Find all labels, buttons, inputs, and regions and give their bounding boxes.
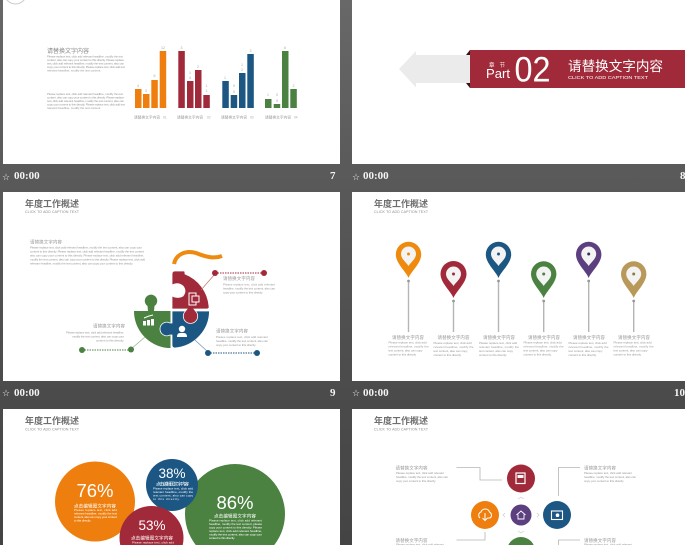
pin captions: relevant headline, modify the bbox=[524, 344, 564, 348]
bar chart: green: 04 bbox=[294, 116, 298, 120]
footer: slide 8 bbox=[352, 170, 685, 183]
text block: top left: copy your content to this directly. bbox=[396, 479, 436, 483]
bubble: 86%: content to this directly. bbox=[209, 536, 235, 540]
node: blue camera bbox=[543, 501, 571, 529]
panel: slide 11 bubbles bbox=[3, 409, 340, 545]
text block: top right: copy your content to this directly. bbox=[584, 479, 624, 483]
panel: slide 12 process bbox=[352, 409, 685, 545]
pin captions: 请替换文字内容 bbox=[528, 334, 560, 341]
title: slide 9: 年度工作概述 bbox=[25, 198, 79, 209]
title: slide 10: 年度工作概述 bbox=[374, 198, 428, 209]
panel: slide 7 bar charts bbox=[3, 0, 340, 164]
node: green bbox=[507, 537, 535, 545]
bar chart: green: 0 bbox=[276, 93, 278, 97]
text block: top right: Please replace text, click add relevant bbox=[584, 471, 632, 475]
pin captions bbox=[388, 334, 654, 357]
title: slide 11 bbox=[25, 415, 80, 432]
bubble: 53%: 点击编辑图文字内容 bbox=[131, 534, 173, 542]
bar chart: orange: 请替换文字内容 bbox=[134, 114, 160, 120]
pin captions: Please replace text, click add bbox=[614, 340, 652, 344]
pin captions: content to this directly. bbox=[524, 352, 552, 356]
pin captions: relevant headline, modify the bbox=[479, 345, 519, 349]
text block: slide 7 lower: content, also can copy your content to this directly. Please replace bbox=[47, 96, 124, 100]
footer: slide 7 bbox=[2, 170, 336, 183]
text block: bottom right: 请替换文字内容 bbox=[584, 537, 616, 544]
callout: blue: headline, modify the text content, also can bbox=[216, 339, 268, 343]
pin captions: relevant headline, modify the bbox=[614, 344, 654, 348]
text block: slide 7 upper: Please replace text, click add relevant headline, modify the text bbox=[47, 54, 123, 58]
text block: slide 7 lower: text, click add relevant headline, modify the text content, also can bbox=[47, 99, 124, 103]
text block: bottom right bbox=[584, 537, 632, 545]
bar chart: blue: 2 bbox=[241, 68, 243, 72]
icon: person bbox=[177, 326, 187, 337]
section label: 章节 bbox=[489, 61, 505, 69]
bubble: 86%: replace text, click add relevant headline, bbox=[209, 529, 262, 533]
bubble: 86%: modify the text content, also can copy your bbox=[209, 532, 262, 536]
bubble: 76%: 76% bbox=[76, 480, 114, 501]
title: slide 10: CLICK TO ADD CAPTION TEXT bbox=[374, 210, 429, 214]
bar chart: crimson: 2 bbox=[197, 65, 199, 69]
bar chart: orange: 6 bbox=[154, 74, 156, 78]
text block: top left: headline, modify the text content, also can bbox=[396, 475, 448, 479]
pin: orange bbox=[396, 242, 421, 332]
callout: green: 请替换文字内容 bbox=[93, 322, 126, 330]
footer: slide 9 bbox=[2, 387, 336, 399]
bar chart: blue: 1 bbox=[224, 76, 226, 80]
callout: blue: Please replace text, click add relevant bbox=[216, 335, 268, 339]
bar chart: green: 1 bbox=[267, 93, 269, 97]
pin: tan bbox=[621, 261, 646, 332]
pin: green bbox=[531, 261, 556, 332]
bar chart: green: 5 bbox=[276, 99, 278, 103]
pin captions: 请替换文字内容 bbox=[483, 334, 516, 341]
bubble: 76% bbox=[55, 462, 135, 542]
bar chart: crimson: 4 bbox=[189, 76, 191, 80]
bar chart: green: 6 bbox=[284, 46, 286, 50]
bubble: 76%: relevant headline, modify the text bbox=[74, 512, 117, 516]
pin captions: content to this directly. bbox=[568, 353, 597, 357]
pin captions: text content, also can copy bbox=[524, 348, 558, 352]
pin captions: Please replace text, click add bbox=[434, 341, 472, 345]
panel: slide 10 map pins bbox=[352, 192, 685, 381]
footer: slide 9: 00:00 bbox=[14, 387, 40, 399]
text block: top right bbox=[584, 464, 636, 483]
callout: green: content to this directly. bbox=[96, 338, 124, 342]
callout: blue bbox=[195, 328, 268, 356]
bar chart: orange bbox=[134, 46, 167, 120]
footer: slide 10: ☆ bbox=[352, 389, 360, 399]
bubble: 38%: 38% bbox=[158, 466, 186, 481]
pin captions: Please replace text, click add bbox=[479, 341, 517, 345]
pin captions: Please replace text, click add bbox=[568, 341, 607, 345]
bar chart: blue: 1 bbox=[241, 63, 243, 67]
bar chart: crimson: 请替换文字内容 bbox=[177, 114, 203, 120]
bubble: 76%: Please replace text, click add bbox=[74, 508, 117, 512]
title: slide 11: 年度工作概述 bbox=[25, 415, 79, 426]
pin: crimson bbox=[440, 261, 466, 332]
bar chart: crimson: 1 bbox=[206, 84, 208, 88]
node: purple home bbox=[510, 504, 532, 526]
callout: red: 请替换文字内容 bbox=[223, 275, 256, 282]
text block: top left: modify the text content, also can copy your content to this directly. Please replace text, click add bbox=[30, 258, 145, 262]
puzzle: red piece bbox=[172, 271, 209, 323]
pin: purple bbox=[576, 242, 601, 332]
bubble: 86%: Please replace text, click add relevant bbox=[209, 518, 262, 522]
banner: red ribbon bbox=[470, 50, 685, 88]
footer: slide 10: 10 bbox=[674, 387, 685, 399]
bubble: 86%: copy your content to this directly. Please bbox=[209, 526, 262, 530]
pin captions: content to this directly. bbox=[388, 352, 417, 356]
text block: top left bbox=[30, 238, 145, 266]
ribbon folds bbox=[466, 50, 470, 55]
text block: top left: also can copy your content to this directly. Please replace text, click add relevant headline, bbox=[30, 254, 144, 258]
title: slide 11: CLICK TO ADD CAPTION TEXT bbox=[25, 428, 80, 432]
text block: slide 7 lower bbox=[47, 92, 125, 110]
pin captions: text content, also can copy bbox=[388, 348, 423, 352]
bar chart: orange: 12 bbox=[161, 46, 165, 50]
footer: slide 7: 00:00 bbox=[14, 170, 40, 182]
banner title: 请替换文字内容 bbox=[568, 58, 663, 74]
footer: slide 7: 7 bbox=[330, 170, 336, 182]
bar chart: blue: 请替换文字内容 bbox=[221, 114, 247, 120]
bar chart: blue bbox=[221, 49, 254, 120]
bar chart: blue: 3 bbox=[250, 49, 252, 53]
text block: top left: content to this directly. Please replace text, click add relevant headline, modify the text content bbox=[30, 250, 144, 254]
bar chart: orange: 01 bbox=[163, 116, 167, 120]
bubble: 76%: to this directly. bbox=[74, 518, 91, 522]
footer: slide 10 bbox=[352, 387, 685, 399]
text block: top left: Please replace text, click add relevant bbox=[396, 471, 444, 475]
decoration: orange wave bbox=[174, 252, 222, 264]
text block: bottom left bbox=[396, 537, 444, 545]
chevrons bbox=[503, 497, 539, 533]
bubble: 38%: to this directly. bbox=[153, 497, 180, 501]
text block: slide 7 upper bbox=[47, 54, 125, 72]
text block: top left: 请替换文字内容 bbox=[396, 464, 428, 472]
connectors bbox=[456, 468, 580, 545]
bar chart: crimson: 3 bbox=[180, 46, 182, 50]
icon: partial circle at top left bbox=[4, 0, 26, 4]
bar chart: orange: 4 bbox=[137, 84, 139, 88]
pin captions: text content, also can copy bbox=[614, 348, 648, 352]
panel: slide 8 section banner bbox=[352, 0, 685, 164]
icon: tablet chart bbox=[189, 293, 199, 305]
text block: slide 7 upper: content, also can copy your content to this directly. Please replace bbox=[47, 58, 124, 62]
pin captions: 请替换文字内容 bbox=[573, 334, 606, 341]
pin: blue bbox=[486, 242, 511, 332]
text block: top left: Please replace text, click add relevant headline, modify the text content, also can copy your bbox=[30, 246, 142, 250]
pin captions: content to this directly. bbox=[614, 352, 642, 356]
text block: slide 7 lower: Please replace text, click add relevant headline, modify the text bbox=[47, 92, 123, 96]
bar chart: green: 请替换文字内容 bbox=[265, 114, 291, 120]
title: slide 9: CLICK TO ADD CAPTION TEXT bbox=[25, 210, 80, 214]
bubble: 76%: content, also can copy your content bbox=[74, 515, 117, 519]
callout: red: copy your content to this directly. bbox=[223, 290, 263, 294]
section label: Part bbox=[486, 66, 510, 81]
footer: slide 9: ☆ bbox=[2, 389, 10, 399]
bar chart: crimson: 1 bbox=[189, 71, 191, 75]
bubble: 38%: 点击编辑图文字内容 bbox=[156, 480, 189, 488]
bar chart: crimson bbox=[177, 46, 211, 120]
bar chart: green: 2 bbox=[292, 84, 294, 88]
title: slide 12: 年度工作概述 bbox=[374, 415, 428, 426]
title: slide 12 bbox=[374, 415, 429, 432]
text block: slide 7 upper: text, click add relevant headline, modify the text content, also can bbox=[47, 62, 124, 66]
bar chart: orange: 3 bbox=[145, 89, 147, 93]
node: crimson document bbox=[507, 464, 535, 492]
text block: slide 7 lower: relevant headline, modify the text content. bbox=[47, 106, 101, 110]
title: slide 10 bbox=[374, 198, 429, 214]
banner caption: CLICK TO ADD CAPTION TEXT bbox=[568, 75, 648, 81]
section number: 02 bbox=[514, 50, 550, 90]
bar chart: blue: 03 bbox=[250, 116, 254, 120]
pin captions: relevant headline, modify the bbox=[388, 344, 429, 348]
puzzle: blue piece bbox=[160, 311, 210, 348]
bubble: 38%: relevant headline, modify the bbox=[153, 490, 193, 494]
bar chart: green bbox=[265, 46, 298, 120]
bar chart: blue: 0 bbox=[233, 84, 235, 88]
callout: green: modify the text content, also can copy your bbox=[72, 334, 124, 338]
footer: slide 7: ☆ bbox=[2, 173, 10, 183]
pin captions: relevant headline, modify the bbox=[434, 345, 474, 349]
bubble: 53%: Please replace text, click add bbox=[132, 540, 174, 544]
bubble: 38%: Please replace text, click add bbox=[153, 486, 193, 490]
bubble: 86%: 86% bbox=[216, 492, 254, 513]
heading: slide 7: 请替换文字内容 bbox=[47, 47, 89, 55]
text block: bottom left: 请替换文字内容 bbox=[396, 537, 428, 544]
title: slide 12: CLICK TO ADD CAPTION TEXT bbox=[374, 428, 429, 432]
footer: slide 10: 00:00 bbox=[363, 387, 389, 399]
title: slide 9 bbox=[25, 198, 80, 214]
pin captions: Please replace text, click add bbox=[524, 340, 562, 344]
callout: blue: 请替换文字内容 bbox=[216, 328, 248, 334]
text block: slide 7 upper: copy your content to this directly. Please replace text, click add text bbox=[47, 65, 125, 69]
callout: red: headline, modify the text content, also can bbox=[223, 286, 275, 290]
text block: top right: headline, modify the text content, also can bbox=[584, 475, 636, 479]
pin captions: 请替换文字内容 bbox=[618, 334, 650, 341]
bar chart: crimson: 1 bbox=[206, 89, 208, 93]
footer: slide 9: 9 bbox=[330, 387, 336, 399]
pin captions: content to this directly. bbox=[434, 353, 462, 357]
text block: top right: 请替换文字内容 bbox=[584, 464, 616, 472]
bubble: 86%: 点击编辑图文字内容 bbox=[214, 512, 256, 520]
text block: slide 7 upper: relevant headline, modify the text content. bbox=[47, 68, 101, 72]
text block: top left: relevant headline, modify the text content, also can copy your content to this directly. bbox=[30, 262, 133, 266]
footer: slide 8: 00:00 bbox=[363, 170, 389, 182]
callout: green: Please replace text, click add relevant headline, bbox=[66, 330, 124, 334]
bubble: 76%: 点击编辑图文字内容 bbox=[74, 502, 116, 510]
bar chart: crimson: 02 bbox=[207, 116, 211, 120]
callout: green bbox=[66, 322, 145, 353]
callout: red: Please replace text, click add relevant bbox=[223, 282, 275, 286]
bubble: 86%: headline, modify the text content, please bbox=[209, 522, 262, 526]
text block: top left: 请替换文字内容 bbox=[30, 238, 62, 246]
pin captions: 请替换文字内容 bbox=[392, 334, 424, 341]
text block: top left bbox=[396, 464, 448, 483]
bubble: 53% bbox=[120, 506, 184, 545]
pin captions: relevant headline, modify the bbox=[568, 345, 609, 349]
callout: red bbox=[201, 270, 275, 294]
bubble: 86% bbox=[185, 464, 285, 545]
bubble: 53%: 53% bbox=[138, 518, 166, 533]
pin captions: content to this directly. bbox=[479, 353, 507, 357]
pin captions: text content, also can copy bbox=[479, 349, 514, 353]
pin captions: text content, also can copy bbox=[568, 349, 603, 353]
footer: slide 8: ☆ bbox=[352, 173, 360, 183]
callout: blue: copy your content to this directly. bbox=[216, 343, 256, 347]
icon: chart bbox=[143, 315, 154, 326]
pin captions: 请替换文字内容 bbox=[438, 334, 470, 341]
bubble: 38% bbox=[146, 459, 198, 511]
bar chart: blue: 5 bbox=[233, 90, 235, 94]
node: orange cloud bbox=[471, 501, 499, 529]
panel: slide 9 puzzle bbox=[3, 192, 340, 381]
text block: slide 7 lower: copy your content to this directly. Please replace text, click add text bbox=[47, 102, 125, 106]
puzzle: green piece bbox=[134, 295, 170, 348]
bubble: 38%: text content, also can copy bbox=[153, 494, 194, 498]
pin captions: text content, also can copy bbox=[434, 349, 468, 353]
arrow: grey left arrow bbox=[399, 51, 470, 88]
pin captions: Please replace text, click add bbox=[388, 340, 427, 344]
